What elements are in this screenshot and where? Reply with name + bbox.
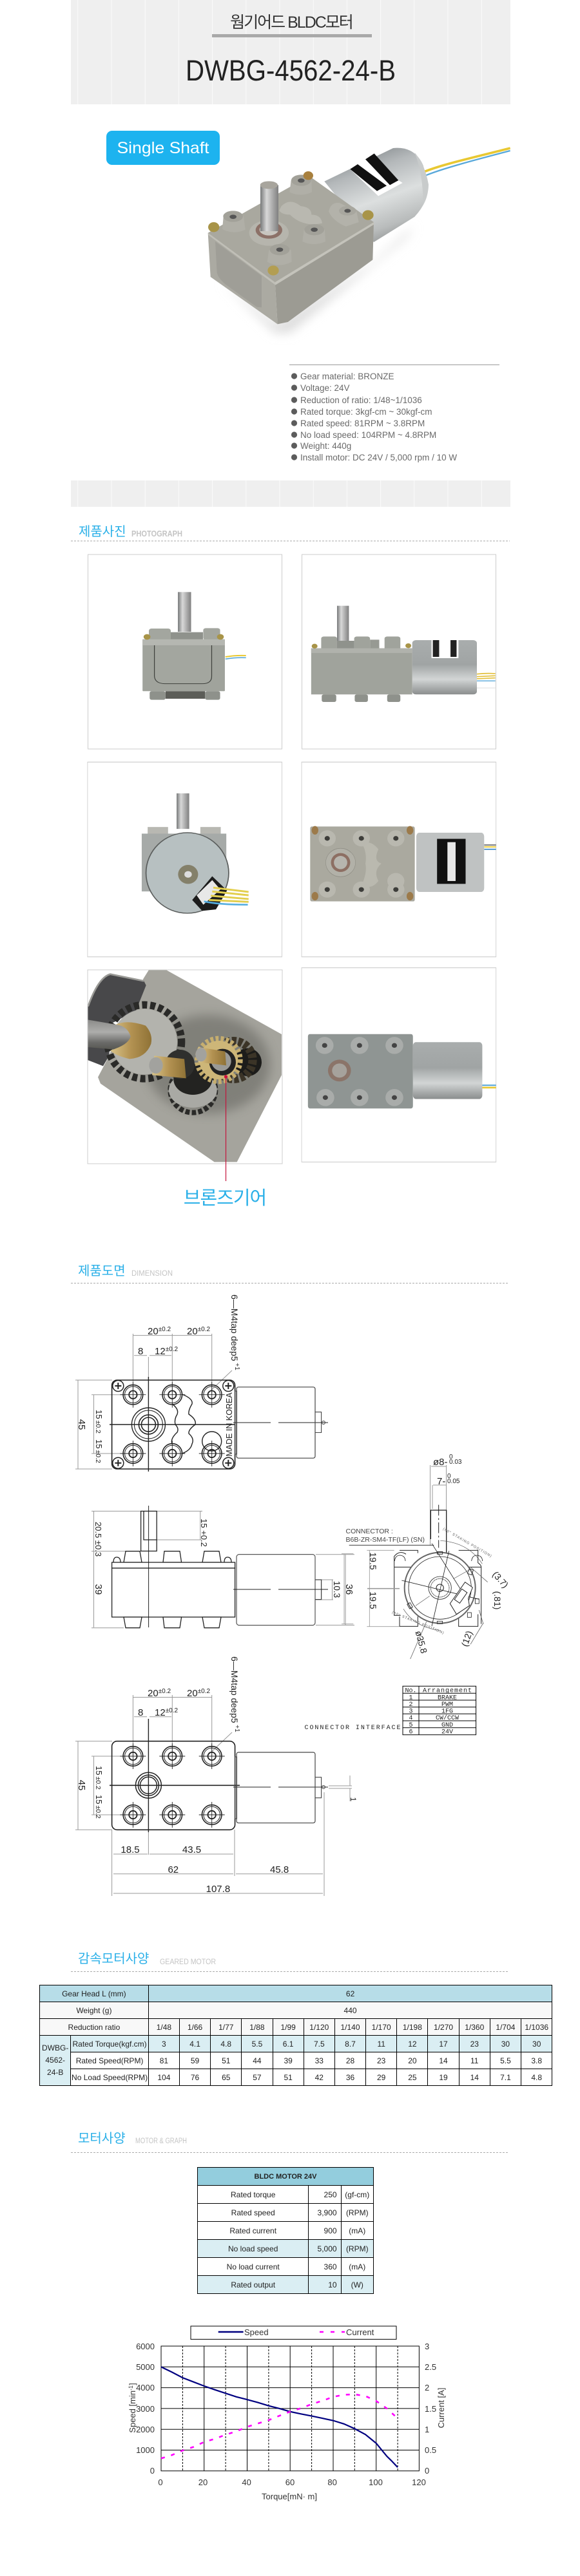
table: geared motor specifications: 59: [191, 2056, 199, 2065]
drawing: lower bottom view with overall dimensions: 6—M4tap deep5: [229, 1656, 240, 1723]
connector interface pin table: 6: [409, 1728, 413, 1736]
drawing: lower bottom view with overall dimensions: 8: [138, 1707, 143, 1718]
table: geared motor specifications: 5.5: [252, 2039, 262, 2048]
drawing: lower bottom view with overall dimensions: 18.5: [121, 1844, 140, 1855]
chart: speed and current versus torque: Torque[mN· m]: [262, 2492, 317, 2501]
table: BLDC motor 24V specifications: (mA): [349, 2262, 365, 2271]
table: geared motor specifications: 4.1: [189, 2039, 200, 2048]
chart: speed and current versus torque: 2000: [136, 2425, 155, 2434]
chart: speed and current versus torque: Speed [min: [128, 2391, 137, 2433]
connector interface pin table: Arrangement: [423, 1687, 472, 1695]
spec bullet list: No load speed: 104RPM ~ 4.8RPM: [300, 430, 436, 440]
photo 3: rear view with connector: [88, 762, 282, 957]
badge: single shaft: [106, 131, 220, 165]
spec bullet list: Gear material: BRONZE: [300, 372, 394, 381]
drawing: top view with mounting holes: +1: [233, 1361, 240, 1370]
photo 2: side view: [302, 554, 496, 749]
drawing: top view with mounting holes: 45: [76, 1419, 87, 1430]
table: BLDC motor 24V specifications: Rated speed: [231, 2208, 275, 2217]
chart legend: Current: [346, 2327, 374, 2337]
drawing: top view with mounting holes: ±0.2: [198, 1326, 211, 1333]
drawing: rear view: ø35.8: [413, 1629, 429, 1654]
section heading: geared motor: [71, 1951, 509, 1972]
table: BLDC motor 24V specifications: (gf-cm): [345, 2190, 369, 2199]
chart: speed and current versus torque: 80: [327, 2477, 337, 2487]
chart: speed and current versus torque: 1.5: [425, 2404, 436, 2414]
section heading: geared motor: 감속모터사양: [78, 1951, 149, 1966]
chart: speed and current versus torque: 6000: [136, 2342, 155, 2351]
section heading: motor and graph: [71, 2131, 509, 2152]
table: geared motor specifications: Weight (g): [76, 2005, 111, 2014]
section heading: photograph: PHOTOGRAPH: [131, 529, 182, 538]
section heading: motor and graph: MOTOR & GRAPH: [135, 2137, 187, 2145]
drawing: side view: 20.5 ±0.3: [93, 1522, 103, 1557]
table: geared motor specifications: 3: [162, 2039, 166, 2048]
table: BLDC motor 24V specifications: No load current: [227, 2262, 280, 2271]
table: geared motor specifications: 1/99: [280, 2022, 296, 2031]
table: geared motor specifications: 28: [346, 2056, 354, 2065]
table: geared motor specifications: 8.7: [345, 2039, 356, 2048]
drawing: top view with mounting holes: MADE IN KOREA: [225, 1392, 234, 1457]
title underline: [212, 34, 372, 37]
table: geared motor specifications: 39: [284, 2056, 293, 2065]
connector interface pin table: 4: [409, 1715, 413, 1722]
drawing: rear view: (60° STAKING POSITION): [442, 1528, 492, 1558]
chart legend: Speed: [244, 2327, 269, 2337]
chart: speed and current versus torque: ]: [128, 2383, 137, 2385]
chart: speed and current versus torque: 0: [150, 2466, 155, 2476]
chart: speed and current versus torque: 3: [425, 2342, 429, 2351]
table: BLDC motor 24V specifications: 250: [324, 2190, 337, 2199]
chart: speed and current versus torque: 0: [425, 2466, 429, 2476]
table: geared motor specifications: 20: [408, 2056, 417, 2065]
table: geared motor specifications: 1/140: [340, 2022, 360, 2031]
drawing: side view: [92, 1506, 354, 1628]
spec bullet list: Install motor: DC 24V / 5,000 rpm / 10 W: [300, 453, 457, 462]
chart: speed and current versus torque: 60: [285, 2477, 295, 2487]
chart: speed and current versus torque: 5000: [136, 2362, 155, 2372]
chart: speed and current versus torque: 4000: [136, 2383, 155, 2392]
drawing: lower bottom view with overall dimensions: 45.8: [270, 1864, 289, 1875]
drawing: top view with mounting holes: 20: [148, 1326, 159, 1337]
table: geared motor specifications: 30: [501, 2039, 510, 2048]
table: geared motor specifications: 23: [470, 2039, 479, 2048]
table: geared motor specifications: 14: [470, 2072, 479, 2081]
shaft dimensions: 0.05: [447, 1478, 460, 1485]
table: BLDC motor 24V specifications: 5,000: [318, 2244, 337, 2253]
title: model number: DWBG-4562-24-B: [186, 54, 396, 87]
chart: speed and current versus torque: 0.5: [425, 2445, 436, 2455]
chart: speed and current versus torque: -1: [128, 2385, 134, 2391]
table: geared motor specifications: 1/66: [188, 2022, 202, 2031]
photo 5: opened gearbox with bronze gears: [88, 970, 282, 1164]
table: geared motor specifications: Rated Speed(RPM): [76, 2056, 143, 2065]
drawing: rear view: 19.5: [368, 1591, 378, 1609]
table: geared motor specifications: 3.8: [531, 2056, 542, 2065]
header band: [71, 0, 510, 104]
drawing: lower bottom view with overall dimensions: 45: [76, 1780, 87, 1790]
drawing: top view with mounting holes: 20: [187, 1326, 198, 1337]
table: BLDC motor 24V specifications: 10: [328, 2280, 337, 2289]
drawing: lower bottom view with overall dimensions: 12: [155, 1707, 166, 1718]
drawing: rear view: (.81): [492, 1591, 503, 1609]
connector interface pin table: GND: [441, 1722, 453, 1729]
table: BLDC motor 24V specifications: 360: [324, 2262, 337, 2271]
table: geared motor specifications: 1/360: [465, 2022, 484, 2031]
shaft dimensions: 0: [447, 1473, 451, 1480]
chart: speed and current versus torque: 2: [425, 2383, 429, 2392]
table: BLDC motor 24V specifications: 3,900: [318, 2208, 337, 2217]
table: geared motor specifications: 29: [377, 2072, 385, 2081]
table: geared motor specifications: 1/77: [218, 2022, 233, 2031]
drawing: lower bottom view with overall dimensions: 20: [187, 1688, 198, 1699]
decorative band below specs: [71, 480, 510, 507]
connector interface pin table: PWM: [441, 1701, 453, 1709]
table: geared motor specifications: 33: [315, 2056, 324, 2065]
table: geared motor specifications: 1/270: [434, 2022, 453, 2031]
speed curve: [161, 2367, 398, 2467]
table: geared motor specifications: 1/170: [372, 2022, 391, 2031]
chart: speed and current versus torque: 2.5: [425, 2362, 436, 2372]
drawing: side view: 15 +0.2: [199, 1519, 209, 1547]
table: geared motor specifications: No Load Speed(RPM): [72, 2072, 148, 2081]
drawing: rear view: B6B-ZR-SM4-TF(LF) (SN): [345, 1536, 425, 1544]
table: geared motor specifications: 62: [346, 1989, 354, 1998]
table: geared motor specifications: 1/704: [496, 2022, 515, 2031]
photo 1: front view: [88, 554, 282, 749]
shaft dimensions: 0: [449, 1454, 453, 1461]
badge: single shaft: Single Shaft: [117, 139, 209, 157]
drawing: lower bottom view with overall dimensions: 15 ±0.2: [94, 1766, 104, 1790]
photo 4: mounting face view: [302, 762, 496, 957]
chart: speed and current versus torque: 120: [412, 2477, 426, 2487]
table: geared motor specifications: 14: [439, 2056, 448, 2065]
drawing: top view with mounting holes: ±0.2: [166, 1346, 179, 1353]
table: geared motor specifications: 17: [439, 2039, 448, 2048]
table: BLDC motor 24V specifications: 900: [324, 2226, 337, 2235]
drawing: lower bottom view with overall dimensions: ±0.2: [166, 1707, 179, 1714]
callout: bronze gear: 브론즈기어: [184, 1188, 266, 1209]
drawing: top view with mounting holes: ±0.2: [159, 1326, 171, 1333]
table: geared motor specifications: 42: [315, 2072, 324, 2081]
table: geared motor specifications: 57: [253, 2072, 262, 2081]
shaft dimensions: [430, 1454, 462, 1546]
drawing: rear view: [342, 1454, 510, 1659]
connector interface pin table: [304, 1686, 476, 1736]
table: geared motor specifications: 4.8: [220, 2039, 231, 2048]
drawing: lower bottom view with overall dimensions: 20: [148, 1688, 159, 1699]
connector interface pin table: 5: [409, 1722, 413, 1729]
section heading: dimension: 제품도면: [78, 1264, 126, 1278]
table: geared motor specifications: 51: [284, 2072, 293, 2081]
table: geared motor specifications: 5.5: [500, 2056, 511, 2065]
main product photo: worm gear motor: [208, 148, 510, 333]
drawing: lower bottom view with overall dimensions: +1: [233, 1723, 240, 1732]
table: geared motor specifications: 4.8: [531, 2072, 542, 2081]
connector interface pin table: 1FG: [441, 1708, 453, 1716]
table: geared motor specifications: 6.1: [283, 2039, 293, 2048]
spec bullet list: Weight: 440g: [300, 441, 351, 451]
drawing: top view with mounting holes: 6—M4tap deep5: [229, 1294, 240, 1361]
chart: speed and current versus torque: 3000: [136, 2404, 155, 2414]
drawing: side view: 39: [93, 1584, 104, 1595]
drawing: top view with mounting holes: [75, 1294, 328, 1472]
connector interface pin table: 1: [409, 1695, 413, 1701]
table: geared motor specifications: 19: [439, 2072, 448, 2081]
spec bullet list: Voltage: 24V: [300, 383, 350, 393]
title: korean product type: 웜기어드 BLDC모터: [230, 14, 353, 32]
connector interface pin table: 2: [409, 1701, 413, 1709]
chart: speed and current versus torque: [128, 2326, 446, 2501]
chart: speed and current versus torque: 20: [198, 2477, 208, 2487]
drawing: lower bottom view with overall dimensions: ±0.2: [198, 1688, 211, 1695]
drawing: rear view: (3.7): [490, 1569, 510, 1590]
table: BLDC motor 24V specifications: [197, 2167, 374, 2294]
table: BLDC motor 24V specifications: BLDC MOTOR 24V: [254, 2173, 316, 2181]
shaft dimensions: ø8-: [433, 1457, 448, 1468]
table: geared motor specifications: [39, 1985, 552, 2086]
callout: bronze gear: [184, 1075, 266, 1209]
drawing: top view with mounting holes: 15 ±0.2: [94, 1439, 104, 1463]
current curve: [161, 2394, 398, 2458]
table: geared motor specifications: DWBG-: [42, 2043, 68, 2052]
drawing: rear view: (12): [459, 1629, 474, 1648]
spec bullet list: [291, 372, 457, 462]
spec bullet list: Rated torque: 3kgf-cm ~ 30kgf-cm: [300, 407, 432, 417]
drawing: lower bottom view with overall dimensions: 15 ±0.2: [94, 1795, 104, 1819]
drawing: top view with mounting holes: 8: [138, 1346, 143, 1357]
table: geared motor specifications: 65: [222, 2072, 230, 2081]
drawing: top view with mounting holes: 12: [155, 1346, 166, 1357]
table: geared motor specifications: 1/120: [309, 2022, 329, 2031]
drawing: lower bottom view with overall dimensions: 1: [349, 1797, 358, 1802]
spec bullet list: Rated speed: 81RPM ~ 3.8RPM: [300, 419, 425, 428]
table: geared motor specifications: Rated Torque(kgf.cm): [72, 2039, 147, 2048]
drawing: top view with mounting holes: 15 ±0.2: [94, 1410, 104, 1434]
connector interface pin table: 24V: [441, 1728, 453, 1736]
connector interface pin table: No.: [405, 1687, 417, 1695]
connector interface pin table: CONNECTOR INTERFACE: [304, 1725, 401, 1732]
table: BLDC motor 24V specifications: Rated torque: [231, 2190, 275, 2199]
section heading: dimension: [71, 1264, 509, 1283]
table: geared motor specifications: 1/1036: [525, 2022, 548, 2031]
table: geared motor specifications: 23: [377, 2056, 385, 2065]
table: geared motor specifications: 76: [191, 2072, 199, 2081]
section heading: dimension: DIMENSION: [131, 1270, 173, 1278]
shaft dimensions: 0.03: [449, 1459, 462, 1466]
connector interface pin table: BRAKE: [438, 1695, 457, 1701]
table: BLDC motor 24V specifications: Rated output: [231, 2280, 275, 2289]
table: geared motor specifications: 25: [408, 2072, 417, 2081]
table: geared motor specifications: 81: [160, 2056, 168, 2065]
table: geared motor specifications: 44: [253, 2056, 262, 2065]
table: BLDC motor 24V specifications: Rated current: [229, 2226, 276, 2235]
drawing: rear view: 19.5: [368, 1552, 378, 1570]
table: geared motor specifications: Gear Head L (mm): [62, 1989, 126, 1998]
photo 6: bottom face view: [302, 968, 496, 1162]
table: geared motor specifications: 36: [346, 2072, 354, 2081]
drawing: side view: 36: [343, 1584, 354, 1595]
table: geared motor specifications: 1/198: [403, 2022, 422, 2031]
table: geared motor specifications: 30: [532, 2039, 541, 2048]
section heading: motor and graph: 모터사양: [78, 2131, 126, 2146]
drawing: lower bottom view with overall dimensions: [75, 1656, 358, 1896]
drawing: lower bottom view with overall dimensions: 62: [168, 1864, 179, 1875]
table: geared motor specifications: 4562-: [45, 2056, 65, 2065]
shaft dimensions: 7-: [437, 1476, 445, 1487]
table: BLDC motor 24V specifications: No load speed: [228, 2244, 278, 2253]
chart: speed and current versus torque: 40: [242, 2477, 251, 2487]
table: BLDC motor 24V specifications: (RPM): [346, 2244, 369, 2253]
table: geared motor specifications: Reduction ratio: [68, 2022, 120, 2031]
table: geared motor specifications: 1/48: [157, 2022, 171, 2031]
connector interface pin table: 3: [409, 1708, 413, 1716]
drawing: lower bottom view with overall dimensions: 43.5: [182, 1844, 201, 1855]
chart: speed and current versus torque: 0: [158, 2477, 163, 2487]
chart: speed and current versus torque: Current [A]: [436, 2388, 446, 2428]
section heading: geared motor: GEARED MOTOR: [160, 1958, 216, 1966]
chart: speed and current versus torque: 1: [425, 2425, 429, 2434]
table: geared motor specifications: 7.5: [314, 2039, 325, 2048]
drawing: rear view: (60° STAKING POSITION): [391, 1611, 445, 1635]
chart: speed and current versus torque: 100: [369, 2477, 383, 2487]
table: geared motor specifications: 1/88: [249, 2022, 265, 2031]
section heading: photograph: 제품사진: [79, 524, 126, 539]
drawing: lower bottom view with overall dimensions: ±0.2: [159, 1688, 171, 1695]
chart legend: [191, 2326, 396, 2339]
connector interface pin table: CW/CCW: [436, 1714, 459, 1722]
spec bullet list: Reduction of ratio: 1/48~1/1036: [300, 395, 422, 405]
drawing: lower bottom view with overall dimensions: 107.8: [206, 1884, 230, 1895]
table: geared motor specifications: 11: [377, 2039, 385, 2048]
drawing: rear view: CONNECTOR :: [345, 1528, 393, 1535]
table: geared motor specifications: 7.1: [500, 2072, 511, 2081]
table: BLDC motor 24V specifications: (mA): [349, 2226, 365, 2235]
photo 5 frame: [88, 970, 282, 1164]
section heading: photograph: [71, 524, 510, 541]
table: geared motor specifications: 440: [344, 2005, 357, 2014]
table: geared motor specifications: 11: [470, 2056, 478, 2065]
table: BLDC motor 24V specifications: (RPM): [346, 2208, 369, 2217]
drawing: side view: 10.3: [332, 1581, 342, 1598]
table: BLDC motor 24V specifications: (W): [351, 2280, 363, 2289]
table: geared motor specifications: 51: [222, 2056, 230, 2065]
table: geared motor specifications: 12: [408, 2039, 417, 2048]
chart: speed and current versus torque: 1000: [136, 2445, 155, 2455]
table: geared motor specifications: 24-B: [47, 2068, 63, 2077]
table: geared motor specifications: 104: [157, 2072, 170, 2081]
